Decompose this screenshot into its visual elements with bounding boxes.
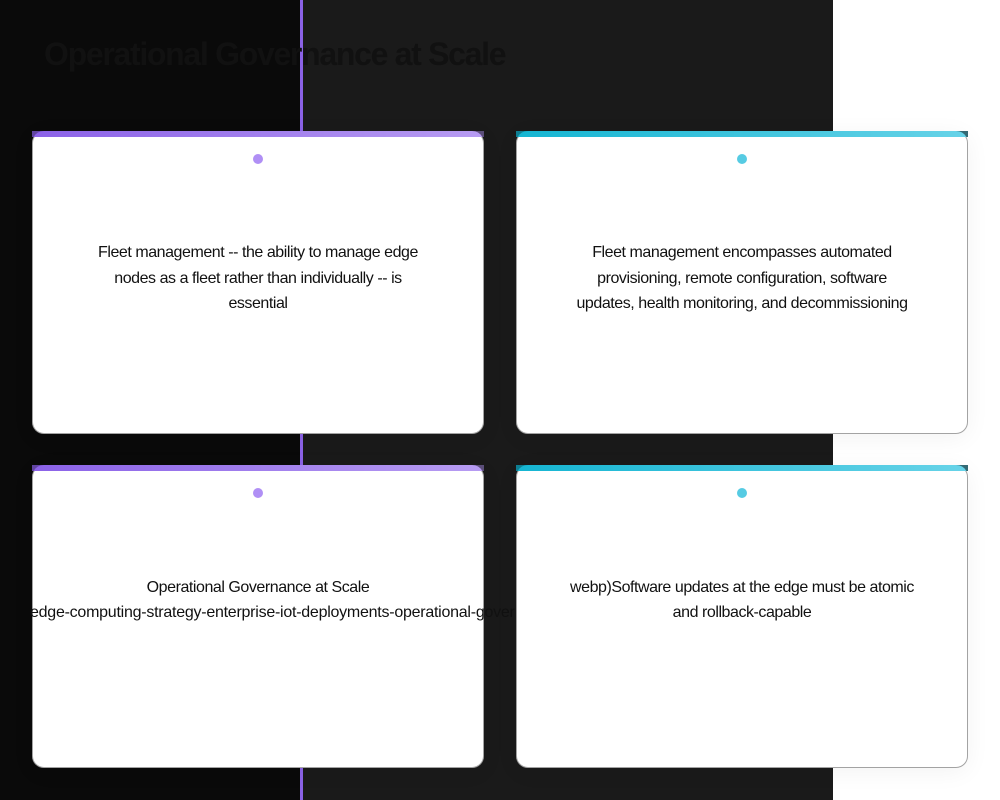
text block <box>576 244 908 312</box>
purple top bar <box>32 465 484 471</box>
icon: cyan dot <box>737 154 747 164</box>
text block: and rollback-capable <box>673 604 811 621</box>
card border <box>32 131 484 434</box>
background: dark main band <box>300 0 833 800</box>
cyan top bar <box>516 465 968 471</box>
purple top bar <box>32 131 484 137</box>
text block <box>98 244 418 312</box>
vertical accent line <box>300 0 303 800</box>
text block <box>30 579 515 621</box>
text block: essential <box>228 295 288 312</box>
title: Operational Governance at Scale <box>44 36 505 72</box>
text block: webp)Software updates at the edge must be atomic <box>570 579 914 596</box>
card border <box>32 465 484 768</box>
panel: software updates <box>516 465 968 768</box>
card border <box>516 131 968 434</box>
card border <box>516 465 968 768</box>
text block: Fleet management -- the ability to manage edge <box>98 244 418 261</box>
cyan top bar <box>516 131 968 137</box>
text block: provisioning, remote configuration, software <box>597 270 887 287</box>
icon: purple dot <box>253 154 263 164</box>
background: black left band <box>0 0 300 800</box>
icon: purple dot <box>253 488 263 498</box>
text block: updates, health monitoring, and decommissioning <box>576 295 908 312</box>
text block: edge-computing-strategy-enterprise-iot-deployments-operational-gover <box>30 604 515 621</box>
panel: fleet management scope <box>516 131 968 434</box>
icon: cyan dot <box>737 488 747 498</box>
panel: fleet management essential <box>32 131 484 434</box>
text block: Operational Governance at Scale <box>147 579 369 596</box>
panel: operational governance caption <box>32 465 484 768</box>
text block <box>570 579 914 621</box>
text block: Fleet management encompasses automated <box>592 244 892 261</box>
text block: nodes as a fleet rather than individually -- is <box>114 270 402 287</box>
